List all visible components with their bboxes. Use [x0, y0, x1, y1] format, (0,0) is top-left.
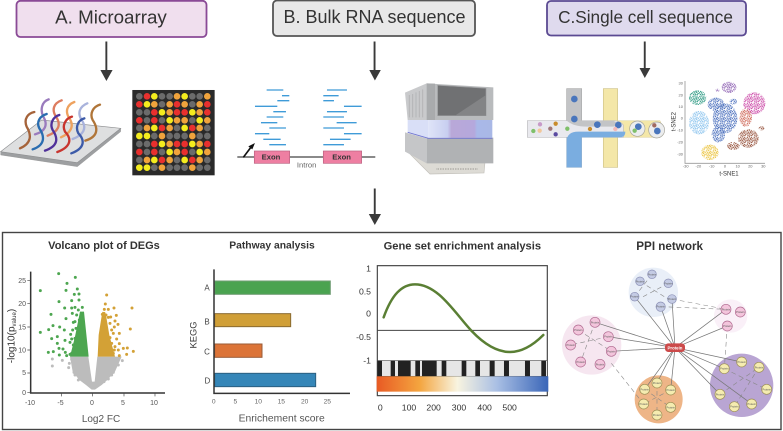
arrow: to analysis panel	[369, 188, 381, 225]
panel: analyses	[2, 232, 781, 430]
axis labels: pathway: B	[204, 317, 210, 326]
cluster backgrounds	[562, 268, 773, 423]
axis labels: GSEA: 200	[426, 403, 441, 413]
chart: gene set enrichment analysis	[356, 240, 548, 413]
chart: t-SNE clusters: 10	[679, 104, 684, 109]
protein nodes: Protein	[607, 349, 616, 353]
axis labels: volcano: 0	[22, 390, 26, 397]
axis labels: volcano: 20	[18, 301, 26, 308]
title: GSEA: Gene set enrichment analysis	[384, 240, 541, 252]
axis labels: pathway	[188, 283, 331, 424]
protein nodes: Protein	[636, 279, 645, 283]
bars	[215, 281, 330, 387]
protein nodes: Protein	[737, 360, 746, 364]
protein nodes: Protein	[664, 281, 673, 285]
protein nodes: Protein	[604, 335, 613, 339]
protein nodes: Protein	[755, 365, 764, 369]
diagram: RNA reads on exons: Exon	[332, 153, 351, 162]
axis labels: GSEA: 0.5	[359, 286, 371, 296]
axis labels: volcano: 10	[18, 348, 26, 354]
axis labels: GSEA: 1	[366, 263, 371, 273]
axis labels: GSEA: 300	[452, 403, 466, 413]
arrow: microarray down	[100, 42, 113, 81]
header: A. Microarray	[16, 1, 206, 37]
protein nodes: Protein	[640, 387, 649, 391]
title: volcano plot: Volcano plot of DEGs	[48, 240, 160, 252]
chart: t-SNE clusters	[672, 81, 766, 178]
microarray heat grid	[132, 90, 215, 175]
protein nodes: Protein	[666, 388, 675, 392]
axis labels: GSEA: 100	[402, 403, 416, 413]
axis labels: pathway: 25	[324, 398, 331, 405]
chart: t-SNE clusters: 30	[679, 81, 684, 86]
axis labels: volcano: 15	[18, 324, 26, 332]
axis labels: pathway: KEGG	[188, 322, 198, 348]
axis labels: volcano: 0	[90, 400, 94, 407]
chart: pathway analysis	[188, 241, 350, 424]
diagram: RNA reads on exons	[237, 90, 375, 170]
icon: microarray slide with strands	[1, 99, 121, 167]
chart: t-SNE clusters: 10	[735, 164, 741, 169]
axis labels: pathway: 15	[278, 398, 285, 405]
chart: t-SNE clusters: 20	[748, 164, 753, 169]
protein nodes: Protein	[762, 387, 771, 391]
protein nodes: Protein	[653, 381, 662, 385]
protein nodes: Protein	[668, 297, 677, 301]
icon: droplet microfluidics	[527, 89, 665, 167]
chart: volcano plot	[27, 272, 165, 396]
protein nodes: Protein	[574, 328, 583, 332]
axis labels: pathway: 10	[255, 398, 262, 405]
header: B. Bulk RNA sequence	[273, 0, 475, 36]
axis labels: volcano: value	[12, 311, 18, 326]
central protein hub: Protein	[668, 345, 683, 350]
protein nodes: Protein	[730, 405, 739, 409]
barcode	[377, 361, 547, 376]
chart: PPI network	[562, 240, 773, 423]
header: C. Single cell sequence: C.Single cell sequence	[558, 7, 733, 27]
chart: t-SNE clusters: -30	[677, 151, 684, 156]
enrichment curve	[384, 284, 543, 352]
protein nodes: Protein	[591, 320, 600, 324]
chart: t-SNE clusters: 0	[724, 164, 727, 169]
title: PPI: PPI network	[636, 240, 704, 253]
protein nodes: Protein	[722, 307, 731, 311]
protein nodes: Protein	[720, 367, 729, 371]
protein nodes: Protein	[630, 295, 639, 299]
axis labels: GSEA: 0	[378, 403, 383, 413]
chart: t-SNE clusters: -20	[677, 139, 684, 144]
axis labels: GSEA: -1	[363, 355, 371, 365]
header: A. Microarray: A. Microarray	[55, 6, 167, 28]
chart: t-SNE clusters: 20	[679, 92, 684, 97]
chart: t-SNE clusters: 0	[681, 116, 684, 121]
arrow: bulk RNA down	[369, 42, 381, 80]
chart: t-SNE clusters: -20	[695, 164, 702, 169]
axis labels: volcano: 25	[18, 278, 26, 285]
protein nodes	[566, 270, 772, 420]
protein nodes: Protein	[566, 343, 575, 347]
axis labels: volcano: -10	[25, 400, 35, 407]
axis labels: pathway: A	[204, 283, 210, 292]
protein nodes: Protein	[653, 413, 662, 417]
axis labels: GSEA: 0	[366, 309, 371, 319]
solid links	[595, 297, 752, 404]
axis labels: pathway: 0	[212, 398, 216, 405]
axis labels: GSEA: -0.5	[356, 332, 371, 342]
axis labels: volcano: 5	[121, 400, 125, 407]
diagram: RNA reads on exons: Exon	[262, 153, 281, 162]
protein nodes: Protein	[747, 402, 756, 406]
axis labels: GSEA	[356, 263, 517, 413]
chart: t-SNE clusters: -30	[683, 164, 689, 169]
chart: t-SNE clusters: t-SNE2	[672, 111, 678, 131]
chart: t-SNE clusters: t-SNE1	[719, 172, 739, 178]
protein nodes: Protein	[656, 305, 665, 309]
axis labels: pathway: 5	[233, 398, 237, 405]
protein nodes: Protein	[596, 362, 605, 366]
axis labels: volcano: 10	[150, 400, 158, 407]
chart: t-SNE clusters: -10	[677, 127, 684, 132]
header: C. Single cell sequence	[547, 1, 746, 36]
axis labels: volcano	[6, 278, 158, 425]
title: pathway analysis: Pathway analysis	[229, 241, 315, 252]
protein nodes: Protein	[666, 405, 675, 409]
protein nodes: Protein	[716, 392, 725, 396]
chart: t-SNE clusters: 30	[761, 164, 766, 169]
axis labels: pathway: C	[204, 347, 210, 356]
axis labels: pathway: 20	[301, 398, 309, 405]
protein nodes: Protein	[723, 324, 732, 328]
axis labels: volcano: -log10(p	[6, 326, 18, 363]
central protein hub	[665, 343, 685, 352]
axis labels: pathway: D	[204, 376, 210, 385]
axis labels: GSEA: 400	[477, 403, 492, 413]
protein nodes: Protein	[639, 402, 648, 406]
axis labels: volcano: )	[6, 309, 18, 312]
protein nodes: Protein	[576, 360, 585, 364]
icon: sequencer machine	[405, 83, 493, 174]
diagram: RNA reads on exons: Intron	[297, 161, 316, 170]
axis labels: pathway: Enrichement score	[239, 413, 325, 424]
axis labels: volcano: 5	[22, 370, 26, 377]
protein nodes: Protein	[648, 272, 657, 276]
protein nodes: Protein	[736, 310, 745, 314]
colour gradient strip	[377, 376, 548, 392]
chart: t-SNE clusters: -10	[709, 164, 715, 169]
arrow: single cell down	[640, 42, 650, 78]
axis labels: volcano: Log2 FC	[82, 414, 120, 425]
axis labels: volcano: -5	[57, 400, 64, 407]
axis labels: GSEA: 500	[502, 403, 517, 413]
header: B. Bulk RNA sequence: B. Bulk RNA sequence	[283, 7, 466, 27]
dashed links	[571, 274, 767, 415]
